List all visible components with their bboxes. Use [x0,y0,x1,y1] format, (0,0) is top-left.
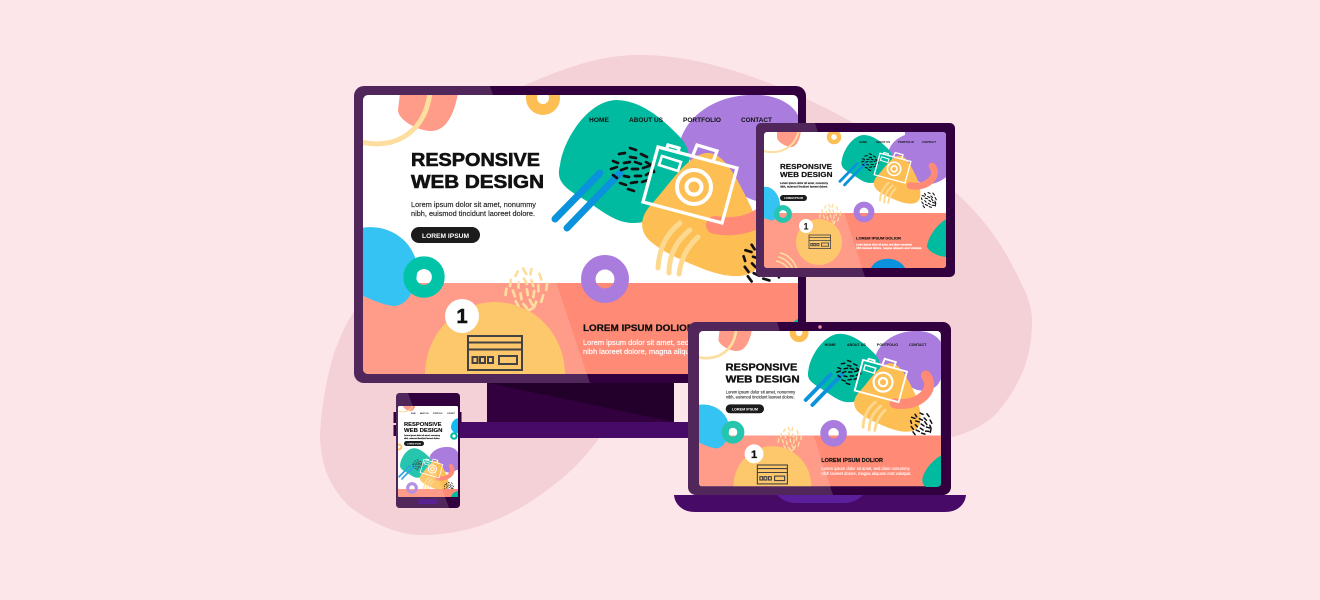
monitor page text: CONTACT [741,117,772,124]
tablet page text: WEB DESIGN [780,170,832,179]
laptop page text: RESPONSIVE [726,362,798,373]
desktop monitor [354,86,806,383]
background blob [320,55,1032,535]
tablet page text [780,140,936,250]
laptop screen artwork [698,326,943,489]
monitor frame [354,86,806,383]
tablet frame [756,123,955,277]
phone screen artwork [397,405,460,498]
monitor page text [411,117,772,356]
laptop page text: HOME [825,343,836,347]
phone page text: HOME [411,413,416,415]
laptop page text: LOREM IPSUM DOLIOR [821,458,883,464]
tablet page text: ABOUT US [876,140,890,144]
phone page text: CONTACT [447,412,456,415]
monitor page text: RESPONSIVE [411,150,540,170]
phone page text [404,412,456,446]
monitor screen artwork [361,86,802,380]
tablet page text: LOREM IPSUM DOLIOR [856,236,901,240]
laptop page text: nibh, euismod tincidunt laoreet dolore. [726,394,795,399]
monitor green ring [410,263,438,291]
monitor page text: Lorem ipsum dolor sit amet, nonummy [411,200,536,209]
monitor stand [460,383,692,438]
phone page text: RESPONSIVE [404,422,442,428]
laptop page text: Lorem ipsum dolor sit amet, nonummy [726,389,796,394]
laptop notch [777,495,863,503]
monitor page text: WEB DESIGN [411,172,544,192]
monitor page text: nibh, euismod tincidunt laoreet dolore. [411,209,535,218]
laptop page text [726,343,927,476]
tablet page text: PORTFOLIO [898,140,914,144]
laptop page text: LOREM IPSUM [732,408,758,412]
monitor page text: LOREM IPSUM [422,233,470,240]
tablet page text: CONTACT [922,140,936,144]
phone page text: WEB DESIGN [404,428,442,434]
tablet page text: nibh laoreet dolore, magna aliquam erat volutpat. [856,246,922,250]
phone page text: ABOUT US [420,412,429,415]
tablet [756,123,955,277]
laptop page text: PORTFOLIO [877,343,898,347]
monitor page text: ABOUT US [629,117,664,124]
phone page text: PORTFOLIO [433,413,443,415]
tablet page text: Lorem ipsum dolor sit amet, nonummy [780,181,829,185]
tablet page text: Lorem ipsum dolor sit amet, sed diam nonummy [856,242,913,246]
phone page text: Lorem ipsum dolor sit amet, nonummy [404,434,440,437]
tablet page text: 1 [803,221,809,231]
laptop page text: ABOUT US [847,343,866,347]
smartphone [394,393,462,508]
laptop page text: Lorem ipsum dolor sit amet, sed diam nonummy [821,466,911,471]
tablet screen artwork [763,130,948,270]
laptop webcam [818,325,822,329]
phone page text: nibh, euismod tincidunt laoreet dolore. [404,437,441,440]
monitor page text: nibh laoreet dolore, magna aliquam erat volutpat. [583,347,745,356]
laptop page text: nibh laoreet dolore, magna aliquam erat volutpat. [821,471,911,476]
phone home button [418,499,437,504]
monitor page text: LOREM IPSUM DOLIOR [583,323,695,333]
monitor page text: Lorem ipsum dolor sit amet, sed diam nonummy [583,338,742,347]
monitor glass reflection [354,86,590,383]
tablet page text: LOREM IPSUM [784,196,803,200]
tablet page text: nibh, euismod tincidunt laoreet dolore. [780,184,828,188]
laptop base [674,495,966,512]
monitor page text: HOME [589,117,610,124]
phone glass reflection [396,393,449,508]
laptop page text: 1 [751,449,757,461]
laptop glass reflection [688,322,833,495]
phone page text: LOREM IPSUM [407,443,421,445]
laptop page text: WEB DESIGN [726,375,800,386]
phone frame [396,393,460,508]
phone side buttons [394,412,462,436]
monitor page text: 1 [456,306,468,328]
tablet page text: HOME [859,140,867,144]
tablet page text: RESPONSIVE [780,162,832,171]
monitor page text: PORTFOLIO [683,117,721,124]
laptop [674,322,966,512]
laptop lid frame [688,322,951,495]
tablet glass reflection [756,123,865,277]
laptop page text: CONTACT [909,343,927,347]
